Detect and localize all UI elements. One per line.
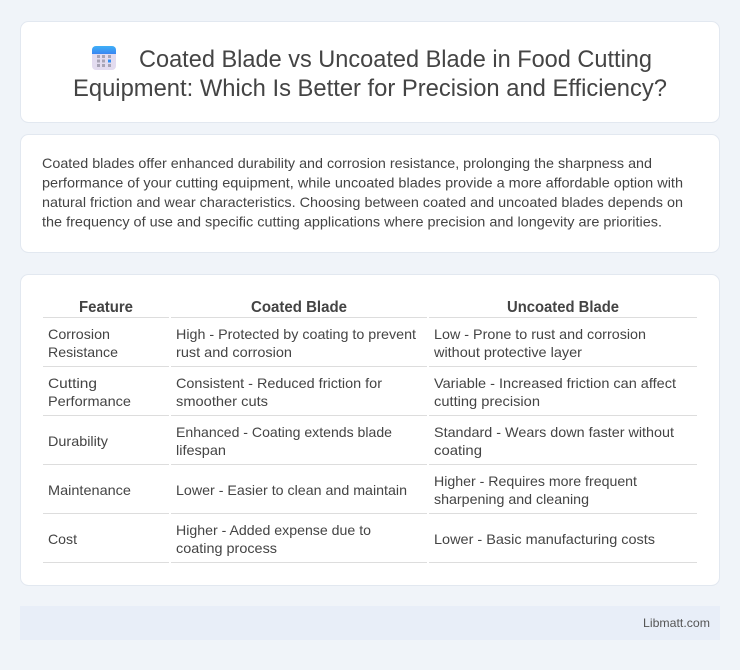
row: durability: Standard - Wears down faster without [434, 424, 674, 440]
panel: introduction [20, 134, 720, 252]
intro text: performance of your cutting equipment, while uncoated blades provide a more affordable option with [42, 174, 683, 190]
row: corrosion resistance: without protective layer [433, 344, 582, 360]
row: cost: Cost [48, 531, 77, 547]
row: durability: Enhanced - Coating extends blade [176, 424, 392, 440]
row: cost: Lower - Basic manufacturing costs [434, 531, 655, 547]
row: corrosion resistance: Low - Prone to rust and corrosion [434, 326, 646, 342]
icon: calendar [92, 46, 116, 70]
title: Equipment: Which Is Better for Precision and Efficiency? [73, 75, 667, 102]
row: corrosion resistance: High - Protected by coating to prevent [176, 326, 416, 342]
row: maintenance: Lower - Easier to clean and maintain [176, 482, 407, 498]
footer: Libmatt.com [643, 616, 710, 630]
title [73, 46, 667, 102]
row: cutting performance [43, 375, 697, 416]
panel: comparison table [20, 274, 720, 586]
table header: Coated Blade [251, 299, 347, 316]
row: cost [43, 522, 697, 563]
row: maintenance: Higher - Requires more frequent [434, 473, 637, 489]
row: maintenance: sharpening and cleaning [434, 491, 589, 507]
row: cutting performance: Consistent - Reduced friction for [176, 375, 382, 391]
row: cutting performance: Cutting [48, 375, 97, 391]
row: cutting performance: Variable - Increased friction can affect [434, 375, 676, 391]
row: cutting performance: cutting precision [434, 393, 540, 409]
row: maintenance: Maintenance [48, 482, 131, 498]
row: corrosion resistance: Corrosion [48, 326, 110, 342]
intro text [42, 155, 683, 230]
row: durability: coating [434, 442, 482, 458]
table header [43, 299, 697, 318]
row: durability: Durability [48, 433, 108, 449]
title: Coated Blade vs Uncoated Blade in Food Cutting [139, 46, 652, 73]
row: corrosion resistance [43, 326, 697, 367]
table header: Feature [79, 299, 133, 316]
row: cost: coating process [176, 540, 277, 556]
row: cutting performance: smoother cuts [176, 393, 268, 409]
intro text: Coated blades offer enhanced durability and corrosion resistance, prolonging the sharpness and [42, 155, 652, 171]
row: durability: lifespan [176, 442, 226, 458]
panel: title card [20, 22, 720, 122]
footer [20, 606, 720, 640]
row: corrosion resistance: rust and corrosion [176, 344, 292, 360]
intro text: the frequency of use and specific cutting applications where precision and longevity are priorities. [42, 214, 662, 230]
row: durability [43, 424, 697, 465]
row: cost: Higher - Added expense due to [176, 522, 371, 538]
table header: Uncoated Blade [507, 299, 619, 316]
row: maintenance [43, 473, 697, 514]
row: cutting performance: Performance [48, 393, 131, 409]
row: corrosion resistance: Resistance [48, 344, 118, 360]
intro text: natural friction and wear characteristics. Choosing between coated and uncoated blades depends on [42, 194, 683, 210]
